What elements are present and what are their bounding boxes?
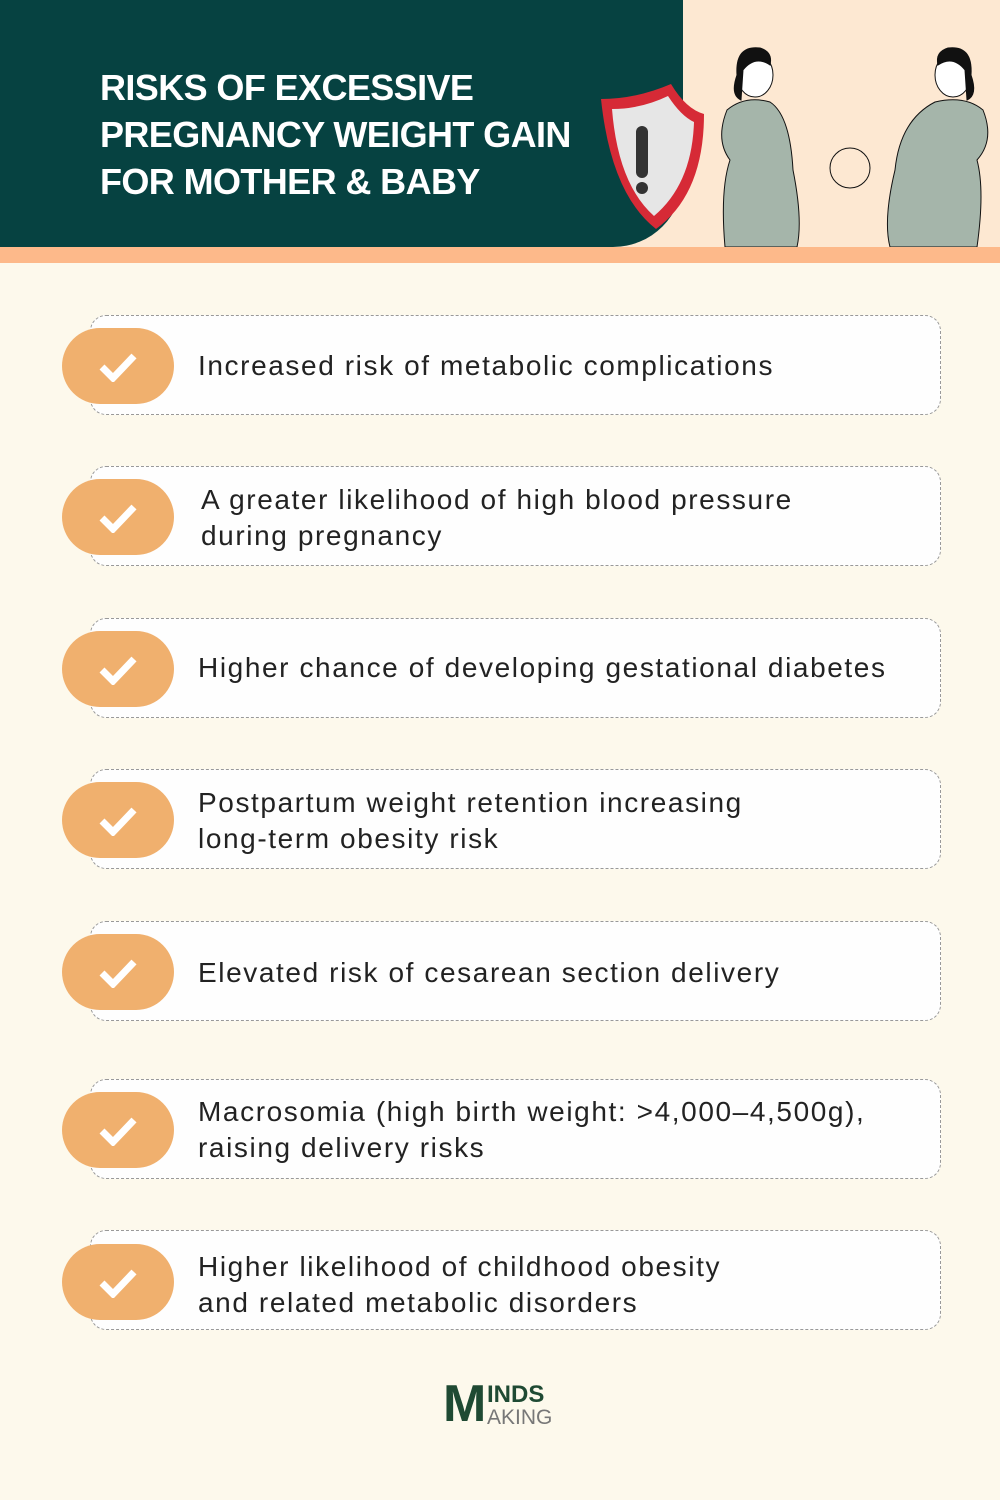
item 3 xyxy=(62,618,941,718)
item 4 xyxy=(62,769,941,869)
text: Higher likelihood of childhood obesity xyxy=(198,1251,721,1282)
text: during pregnancy xyxy=(201,520,443,551)
item 5 xyxy=(62,921,941,1021)
item 1 xyxy=(62,315,941,415)
illustration: women xyxy=(721,47,988,247)
item 6 xyxy=(62,1079,941,1179)
title xyxy=(100,67,571,202)
text: and related metabolic disorders xyxy=(198,1287,638,1318)
text: Higher chance of developing gestational diabetes xyxy=(198,652,887,683)
text: raising delivery risks xyxy=(198,1132,485,1163)
logo: M xyxy=(443,1375,486,1433)
logo xyxy=(443,1375,552,1433)
text: A greater likelihood of high blood pressure xyxy=(201,484,793,515)
title: PREGNANCY WEIGHT GAIN xyxy=(100,114,571,155)
header xyxy=(0,0,1000,247)
logo: INDS xyxy=(487,1381,544,1408)
logo: AKING xyxy=(487,1406,552,1429)
title: FOR MOTHER & BABY xyxy=(100,161,480,202)
text: Postpartum weight retention increasing xyxy=(198,787,743,818)
text: Elevated risk of cesarean section delivery xyxy=(198,957,780,988)
icon: warning shield xyxy=(601,84,704,229)
item 7 xyxy=(62,1230,941,1330)
item 2 xyxy=(62,466,941,566)
text: Increased risk of metabolic complications xyxy=(198,350,774,381)
text: Macrosomia (high birth weight: >4,000–4,500g), xyxy=(198,1096,865,1127)
text: long-term obesity risk xyxy=(198,823,499,854)
title: RISKS OF EXCESSIVE xyxy=(100,67,473,108)
